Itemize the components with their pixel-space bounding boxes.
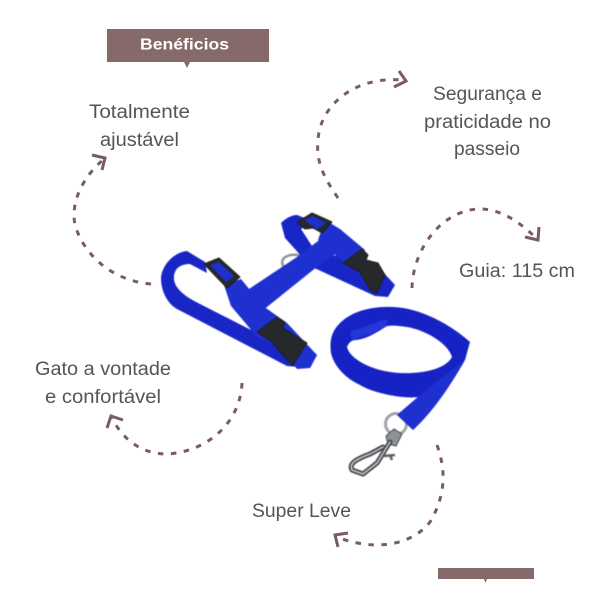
text: Super Leve: Super Leve (252, 501, 351, 522)
right lower strap (310, 252, 395, 297)
leash tail highlight (397, 362, 462, 430)
cross strap (246, 229, 350, 311)
leash body (330, 307, 470, 430)
arrow: harness to Gato a vontade (107, 383, 242, 454)
harness product image (161, 213, 395, 369)
bottom decorative banner (438, 568, 534, 583)
snap hook latch (384, 455, 395, 460)
text: Gato a vontade e confortável: e confortável (45, 387, 161, 408)
snap hook ring (386, 414, 406, 434)
text: Segurança e praticidade no passeio: praticidade no (424, 112, 551, 133)
left clip buckle (257, 317, 307, 365)
right clip buckle (343, 249, 385, 293)
left vertical strap (224, 279, 317, 369)
text: Totalmente ajustável (89, 102, 190, 151)
text: Totalmente ajustável: ajustável (100, 130, 179, 151)
top slide buckle (297, 213, 332, 233)
left slide buckle (204, 258, 240, 288)
text: Segurança e praticidade no passeio: passeio (454, 139, 520, 160)
snap hook body (351, 442, 390, 474)
heading banner: Benefícios: Benéficios (140, 36, 229, 54)
strap highlight (350, 319, 388, 340)
heading banner: Benefícios (107, 29, 269, 68)
arrow: leash to Guia (412, 209, 539, 288)
text: Gato a vontade e confortável (35, 359, 171, 408)
top loop strap (281, 215, 332, 268)
arrow: snap hook to Super Leve (335, 445, 443, 547)
left loop strap (161, 251, 317, 368)
arrow: harness to Totalmente ajustável (74, 155, 151, 284)
text: Guia 115 cm: Guia: 115 cm (459, 261, 575, 282)
metal O-ring (281, 253, 313, 275)
text: Totalmente ajustável: Totalmente (89, 102, 190, 123)
snap hook swivel (386, 429, 402, 446)
leash product image (330, 307, 470, 474)
text: Segurança e praticidade no passeio (424, 84, 551, 160)
text: Gato a vontade e confortável: Gato a vontade (35, 359, 171, 380)
text: Segurança e praticidade no passeio: Segurança e (433, 84, 542, 105)
right upper strap (318, 220, 365, 265)
arrow: harness to Segurança (318, 71, 406, 198)
